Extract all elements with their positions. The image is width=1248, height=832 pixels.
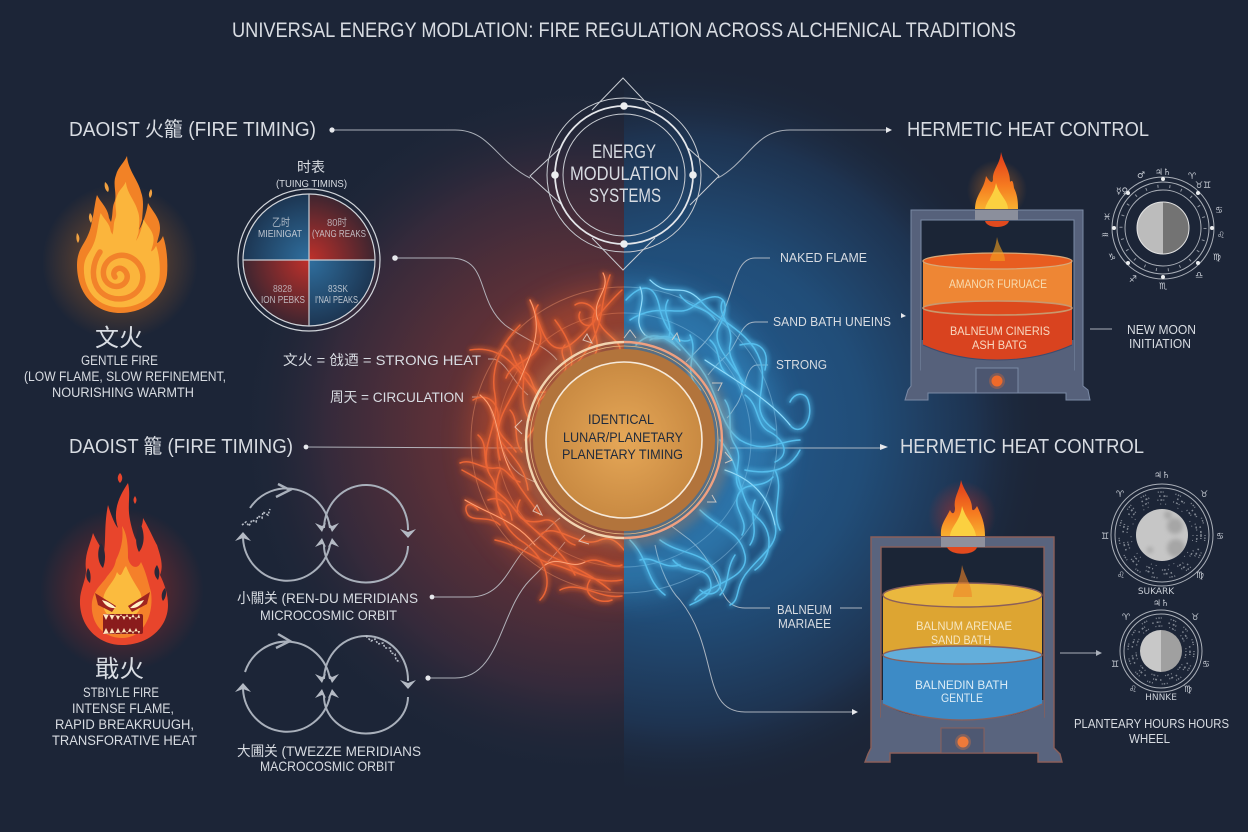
vessel labels: BALNEDIN BATH bbox=[915, 680, 1008, 692]
vessel upper layer bbox=[923, 261, 1072, 308]
zodiac marks: ♌ bbox=[1117, 571, 1125, 581]
label: planetary hours wheel: PLANTEARY HOURS HOURS bbox=[1074, 716, 1229, 731]
central label: PLANETARY TIMING bbox=[562, 446, 683, 462]
central label bbox=[562, 411, 684, 462]
icon: martial fire flame bbox=[40, 473, 204, 672]
quadrant wheel heading: 时表 bbox=[297, 159, 325, 175]
label: strong heat: 文火 = 戗迺 = STRONG HEAT bbox=[283, 352, 481, 368]
zodiac marks: ♍ bbox=[1184, 685, 1192, 695]
ring chevrons bbox=[515, 330, 732, 544]
wheel: new moon lunar wheel bbox=[1101, 168, 1225, 292]
zodiac marks: ♐ bbox=[1129, 275, 1137, 285]
zodiac marks: ♏ bbox=[1159, 282, 1167, 292]
text block: martial fire: RAPID BREAKRUUGH, bbox=[55, 717, 194, 732]
text block: gentle fire: (LOW FLAME, SLOW REFINEMENT, bbox=[24, 369, 226, 384]
heading: Hermetic heat control top: HERMETIC HEAT CONTROL bbox=[907, 119, 1149, 141]
firebox bbox=[976, 368, 1018, 393]
emblem label: MODULATION bbox=[570, 164, 679, 185]
pointer: new moon bbox=[1090, 328, 1112, 330]
zodiac marks: ♒ bbox=[1101, 231, 1109, 241]
zodiac marks: ♑ bbox=[1108, 253, 1116, 263]
zodiac marks: ♓ bbox=[1103, 213, 1111, 223]
emblem label: SYSTEMS bbox=[589, 186, 661, 207]
emblem label: ENERGY bbox=[592, 142, 656, 163]
zodiac marks: ♌ bbox=[1129, 685, 1137, 695]
text block: martial fire: TRANSFORATIVE HEAT bbox=[52, 733, 197, 748]
vessel labels: AMANOR FURUACE bbox=[949, 279, 1047, 291]
text block: macrocosmic orbit: 大圃关 (TWEZZE MERIDIANS bbox=[237, 743, 421, 759]
heading: Hermetic heat control bottom: HERMETIC HEAT CONTROL bbox=[900, 436, 1144, 458]
text block: martial fire: INTENSE FLAME, bbox=[72, 701, 174, 716]
vessel lower layer bbox=[923, 308, 1072, 360]
label: circulation: 周天 = CIRCULATION bbox=[330, 389, 464, 405]
small vessel flame bbox=[953, 565, 972, 597]
diagram: macrocosmic orbit bbox=[235, 634, 416, 733]
quadrant labels bbox=[258, 216, 366, 306]
vessel labels: ASH BATG bbox=[972, 340, 1027, 352]
text block: macrocosmic orbit: MACROCOSMIC ORBIT bbox=[260, 758, 395, 774]
zodiac marks: ♉ bbox=[1200, 490, 1208, 500]
text block: gentle fire bbox=[24, 325, 226, 400]
zodiac marks: ♋ bbox=[1216, 532, 1224, 542]
zodiac marks: ♃♄ bbox=[1155, 168, 1171, 178]
zodiac marks: HNNKE bbox=[1145, 693, 1177, 703]
text block: gentle fire: 文火 bbox=[95, 325, 143, 352]
zodiac marks: ♊ bbox=[1101, 532, 1109, 542]
label: planetary hours wheel bbox=[1074, 716, 1229, 746]
emblem label bbox=[570, 142, 679, 207]
label: balneum mariae: MARIAEE bbox=[778, 617, 831, 631]
quadrant labels: 8828 bbox=[273, 284, 292, 295]
label: balneum mariae: BALNEUM bbox=[777, 603, 832, 617]
zodiac marks bbox=[1101, 168, 1225, 292]
half-lit moon bbox=[1140, 630, 1182, 672]
quadrant wheel heading: (TUING TIMINS) bbox=[276, 178, 347, 190]
text block: macrocosmic orbit bbox=[237, 743, 421, 774]
wheel: half moon planetary wheel bbox=[1111, 599, 1210, 703]
zodiac marks: SUKARK bbox=[1138, 587, 1175, 597]
zodiac marks: ♃♄ bbox=[1153, 599, 1169, 609]
quadrant labels: 乙时 bbox=[272, 216, 290, 229]
vessel labels: BALNUM ARENAE bbox=[916, 621, 1012, 633]
right side labels bbox=[773, 251, 891, 631]
label: balneum mariae bbox=[777, 603, 832, 631]
central label: IDENTICAL bbox=[588, 411, 654, 427]
zodiac marks: ♈ bbox=[1122, 613, 1131, 623]
vessel labels: BALNEUM CINERIS bbox=[950, 326, 1050, 338]
chart: timing quadrant wheel bbox=[238, 159, 380, 331]
heading: Daoist fire timing top: DAOIST 火籠 (FIRE TIMING) bbox=[69, 118, 316, 141]
upper flame bbox=[967, 152, 1027, 227]
text block: gentle fire: GENTLE FIRE bbox=[81, 353, 158, 368]
quadrant wheel heading bbox=[276, 159, 347, 190]
connector lines bbox=[305, 130, 888, 712]
zodiac marks bbox=[1111, 599, 1210, 703]
zodiac marks: ♌ bbox=[1217, 231, 1225, 241]
half moon bbox=[1137, 202, 1189, 254]
text block: martial fire bbox=[52, 656, 197, 748]
vessel labels: GENTLE bbox=[941, 693, 983, 705]
icon: gentle fire flame bbox=[42, 156, 198, 340]
label: new moon initiation: NEW MOON bbox=[1127, 323, 1196, 337]
vessel labels: SAND BATH bbox=[931, 635, 991, 647]
zodiac marks bbox=[1101, 471, 1224, 597]
zodiac marks: ♉♊ bbox=[1195, 181, 1211, 191]
zodiac marks: ♊ bbox=[1111, 660, 1119, 670]
firebox bbox=[941, 728, 984, 753]
zodiac marks: ♍ bbox=[1196, 571, 1204, 581]
text block: martial fire: 戢火 bbox=[95, 656, 144, 683]
text block: gentle fire: NOURISHING WARMTH bbox=[52, 385, 194, 400]
zodiac marks: ♂ bbox=[1137, 171, 1145, 181]
label: new moon initiation bbox=[1127, 323, 1196, 351]
text block: microcosmic orbit: 小關关 (REN-DU MERIDIANS bbox=[237, 590, 418, 606]
zodiac marks: ♍ bbox=[1213, 253, 1221, 263]
diagram: microcosmic orbit bbox=[235, 484, 416, 582]
quadrant labels: ION PEBKS bbox=[261, 295, 305, 306]
central label: LUNAR/PLANETARY bbox=[563, 429, 684, 445]
central circle: identical lunar/planetary timing bbox=[516, 332, 732, 548]
quadrant labels: 83SK bbox=[328, 284, 348, 295]
yellow sand layer bbox=[883, 595, 1042, 655]
text block: microcosmic orbit: MICROCOSMIC ORBIT bbox=[260, 607, 397, 623]
vessel labels bbox=[915, 621, 1012, 705]
text block: microcosmic orbit bbox=[237, 590, 418, 623]
connector dots and arrowheads bbox=[304, 127, 906, 715]
label: new moon initiation: INITIATION bbox=[1129, 337, 1191, 351]
upper flame bbox=[928, 480, 996, 554]
quadrant labels: I'NAI PEAKS bbox=[315, 295, 358, 306]
zodiac marks: ☿♀ bbox=[1116, 187, 1128, 197]
quadrant labels: MIEINIGAT bbox=[258, 229, 302, 240]
quadrant labels: (YANG REAKS bbox=[312, 229, 366, 240]
concentric orbit rings bbox=[471, 287, 777, 593]
title: UNIVERSAL ENERGY MODLATION: FIRE REGULATION ACROSS ALCHENICAL TRADITIONS bbox=[232, 19, 1016, 42]
zodiac marks: ♎ bbox=[1195, 271, 1203, 281]
label: sand bath: SAND BATH UNEINS bbox=[773, 315, 891, 329]
label: naked flame: NAKED FLAME bbox=[780, 251, 867, 265]
water energy wisps bbox=[624, 272, 814, 609]
full moon bbox=[1136, 509, 1188, 561]
wheel: full moon planetary wheel bbox=[1101, 471, 1224, 597]
zodiac marks: ♋ bbox=[1202, 660, 1210, 670]
furnace: ash bath bbox=[905, 152, 1090, 400]
zodiac marks: ♉ bbox=[1191, 613, 1199, 623]
vessel labels bbox=[949, 279, 1050, 352]
zodiac marks: ♈ bbox=[1116, 490, 1125, 500]
zodiac marks: ♈ bbox=[1188, 172, 1197, 182]
label: planetary hours wheel: WHEEL bbox=[1129, 731, 1170, 746]
text block: martial fire: STBIYLE FIRE bbox=[83, 685, 159, 700]
zodiac marks: ♃♄ bbox=[1154, 471, 1170, 481]
quadrant labels: 80时 bbox=[327, 217, 347, 229]
zodiac marks: ♋ bbox=[1215, 206, 1223, 216]
heading: Daoist fire timing bottom: DAOIST 籠 (FIRE TIMING) bbox=[69, 435, 293, 458]
small vessel flame bbox=[990, 237, 1005, 261]
arrow: to planetary wheel bbox=[1060, 650, 1102, 656]
blue water layer bbox=[883, 655, 1042, 720]
label: strong: STRONG bbox=[776, 358, 827, 372]
furnace: sand and water bath bbox=[865, 480, 1062, 762]
fire energy wisps bbox=[455, 268, 624, 608]
diagram: energy modulation systems emblem bbox=[530, 78, 719, 270]
